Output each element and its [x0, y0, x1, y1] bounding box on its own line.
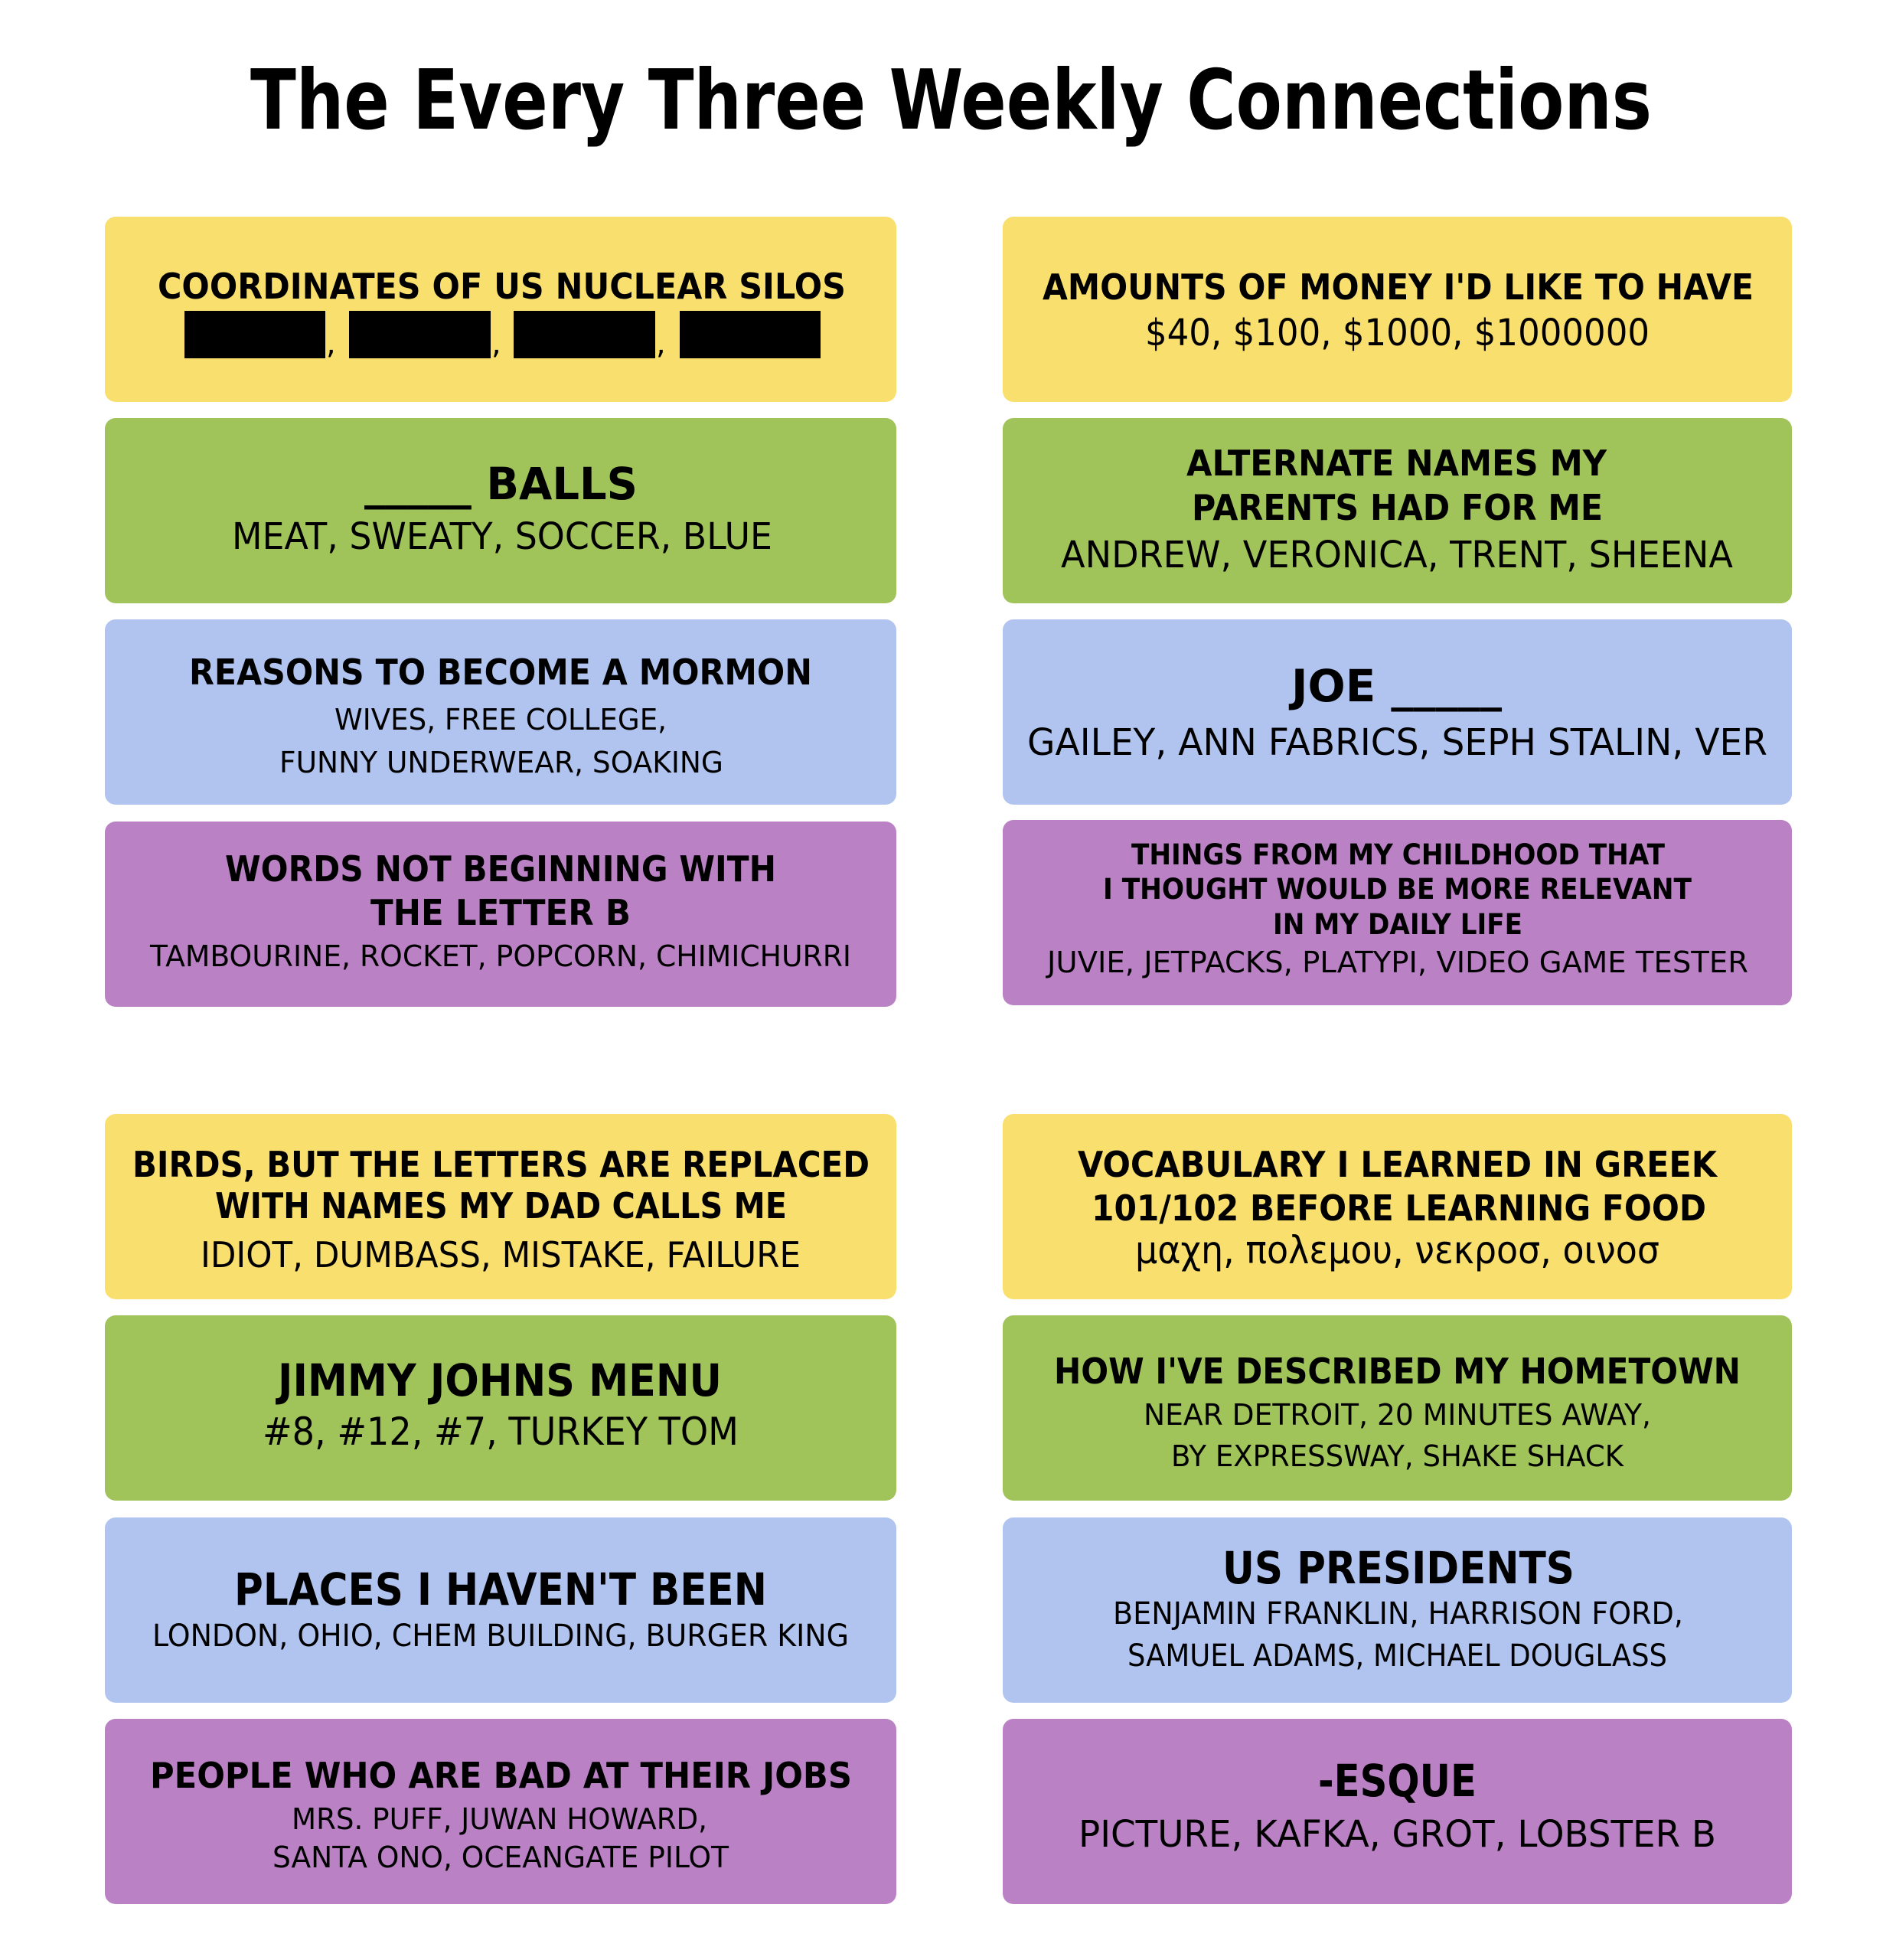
card: amounts of money — [1003, 217, 1792, 402]
card: hometown: BY EXPRESSWAY, SHAKE SHACK — [1171, 1439, 1624, 1473]
card: amounts of money: AMOUNTS OF MONEY I'D LIKE TO HAVE — [1043, 266, 1754, 308]
card: bad at jobs — [105, 1719, 896, 1904]
card: birds: WITH NAMES MY DAD CALLS ME — [215, 1185, 787, 1227]
card: greek vocabulary: μαχη, πολεμου, νεκροσ, οινοσ — [1135, 1228, 1659, 1272]
card: places — [105, 1517, 896, 1703]
card: places: LONDON, OHIO, CHEM BUILDING, BURGER KING — [152, 1619, 849, 1654]
card: birds — [105, 1114, 896, 1299]
card: greek vocabulary: VOCABULARY I LEARNED IN GREEK — [1078, 1144, 1718, 1185]
card: coordinates of US nuclear silos: COORDINATES OF US NUCLEAR SILOS — [158, 266, 846, 307]
card: presidents: BENJAMIN FRANKLIN, HARRISON FORD, — [1113, 1596, 1683, 1632]
card: joe: GAILEY, ANN FABRICS, SEPH STALIN, VER — [1027, 721, 1767, 764]
card: hometown — [1003, 1315, 1792, 1501]
card: reasons to become a mormon: FUNNY UNDERWEAR, SOAKING — [279, 746, 723, 779]
card: reasons to become a mormon — [105, 619, 896, 805]
card: jimmy johns: JIMMY JOHNS MENU — [275, 1354, 722, 1406]
card: jimmy johns — [105, 1315, 896, 1501]
card: coordinates of US nuclear silos — [105, 217, 896, 402]
card: presidents: SAMUEL ADAMS, MICHAEL DOUGLASS — [1127, 1638, 1667, 1674]
card: presidents — [1003, 1517, 1792, 1703]
redacted boxes: , — [656, 326, 666, 361]
card: birds: BIRDS, BUT THE LETTERS ARE REPLACED — [132, 1144, 870, 1185]
card: balls: _____ BALLS — [364, 458, 638, 510]
card: joe: JOE _____ — [1288, 660, 1502, 712]
card: greek vocabulary — [1003, 1114, 1792, 1299]
redacted boxes — [184, 311, 821, 361]
card: reasons to become a mormon: WIVES, FREE COLLEGE, — [334, 703, 667, 737]
card: balls: MEAT, SWEATY, SOCCER, BLUE — [232, 515, 772, 558]
card: words not beginning with B — [105, 822, 896, 1007]
card: jimmy johns: #8, #12, #7, TURKEY TOM — [263, 1410, 739, 1454]
redacted boxes: , — [491, 326, 501, 361]
card: esque — [1003, 1719, 1792, 1904]
card: alternate names — [1003, 418, 1792, 603]
card: things from my childhood — [1003, 820, 1792, 1005]
card: things from my childhood: JUVIE, JETPACKS, PLATYPI, VIDEO GAME TESTER — [1046, 946, 1748, 979]
card: presidents: US PRESIDENTS — [1222, 1542, 1575, 1594]
card: bad at jobs: MRS. PUFF, JUWAN HOWARD, — [292, 1802, 707, 1836]
card: esque: -ESQUE — [1318, 1755, 1477, 1807]
card: words not beginning with B: WORDS NOT BEGINNING WITH — [225, 848, 776, 890]
redacted boxes: , — [326, 326, 336, 361]
card: things from my childhood: IN MY DAILY LIFE — [1273, 908, 1522, 941]
card: amounts of money: $40, $100, $1000, $1000000 — [1145, 312, 1650, 354]
card: birds: IDIOT, DUMBASS, MISTAKE, FAILURE — [201, 1234, 801, 1276]
card: things from my childhood: I THOUGHT WOULD BE MORE RELEVANT — [1103, 873, 1692, 906]
card: joe — [1003, 619, 1792, 805]
card: bad at jobs: PEOPLE WHO ARE BAD AT THEIR JOBS — [150, 1755, 852, 1796]
card: words not beginning with B: THE LETTER B — [370, 892, 631, 933]
card: alternate names: PARENTS HAD FOR ME — [1192, 487, 1603, 528]
card: bad at jobs: SANTA ONO, OCEANGATE PILOT — [272, 1841, 729, 1874]
card: alternate names: ALTERNATE NAMES MY — [1186, 443, 1607, 484]
card: places: PLACES I HAVEN'T BEEN — [234, 1563, 767, 1615]
card: things from my childhood: THINGS FROM MY CHILDHOOD THAT — [1131, 838, 1666, 871]
card: balls — [105, 418, 896, 603]
card: esque: PICTURE, KAFKA, GROT, LOBSTER B — [1079, 1813, 1716, 1856]
card: alternate names: ANDREW, VERONICA, TRENT, SHEENA — [1061, 534, 1733, 577]
card: greek vocabulary: 101/102 BEFORE LEARNING FOOD — [1092, 1187, 1706, 1229]
card: reasons to become a mormon: REASONS TO BECOME A MORMON — [189, 652, 812, 693]
card: words not beginning with B: TAMBOURINE, ROCKET, POPCORN, CHIMICHURRI — [149, 939, 851, 973]
card: hometown: NEAR DETROIT, 20 MINUTES AWAY, — [1144, 1398, 1651, 1432]
card: hometown: HOW I'VE DESCRIBED MY HOMETOWN — [1054, 1351, 1741, 1392]
